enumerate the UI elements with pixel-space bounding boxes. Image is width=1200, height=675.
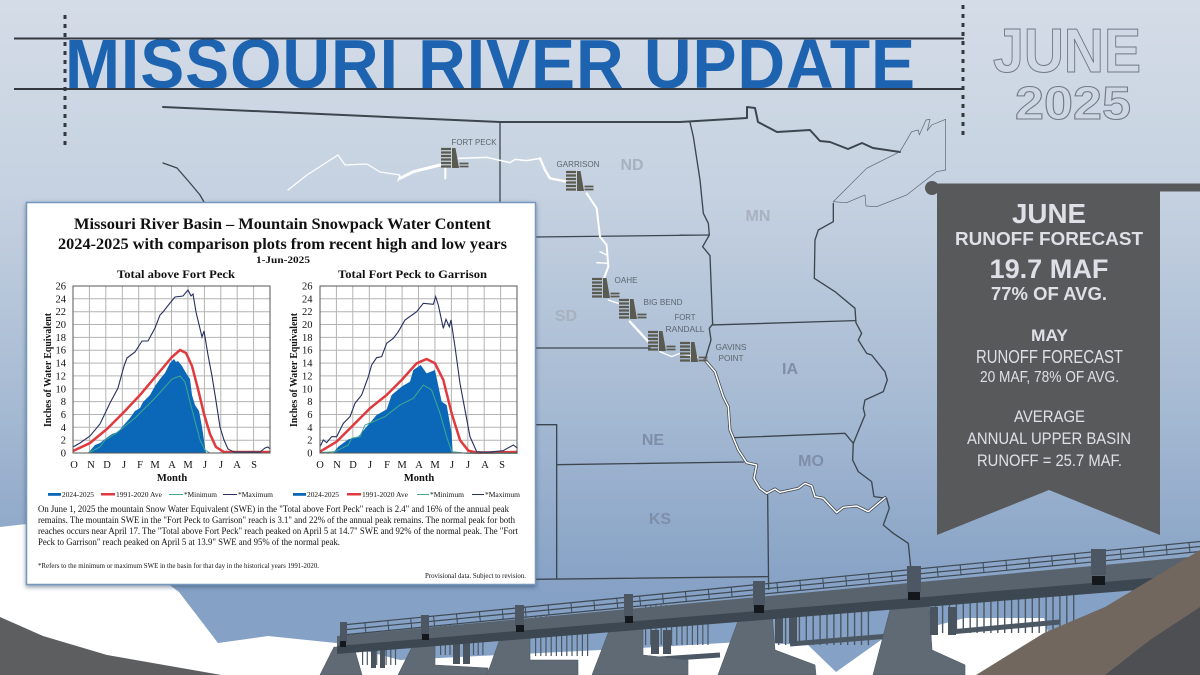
y axis labels: 8 bbox=[61, 397, 66, 408]
y axis labels: 0 bbox=[61, 448, 66, 460]
month labels: A bbox=[415, 460, 423, 471]
average runoff text bbox=[967, 407, 1131, 470]
card heading: 1-Jun-2025 bbox=[256, 256, 310, 266]
y axis labels: 6 bbox=[61, 410, 66, 421]
chart: Total above Fort Peck: Total above Fort Peck bbox=[117, 267, 235, 281]
y axis labels: 14 bbox=[56, 359, 67, 370]
month labels: D bbox=[349, 460, 357, 471]
title with ruled lines: MISSOURI RIVER UPDATE bbox=[65, 25, 915, 103]
dam: Fort Peck bbox=[441, 138, 497, 168]
legend: *Maximum bbox=[238, 490, 273, 499]
railing posts bbox=[340, 549, 1106, 642]
May forecast text: MAY bbox=[1031, 326, 1069, 345]
y axis labels bbox=[302, 282, 313, 460]
state labels: KS bbox=[649, 511, 671, 528]
May forecast text bbox=[976, 326, 1123, 386]
title with ruled lines bbox=[14, 5, 964, 145]
legend bbox=[48, 490, 273, 499]
dam: Gavins Point: GAVINS bbox=[716, 343, 746, 352]
y axis labels: 8 bbox=[307, 397, 312, 408]
dam: Fort Randall: FORT bbox=[674, 313, 696, 322]
state labels: SD bbox=[555, 308, 577, 325]
state borders west and north bbox=[163, 107, 900, 348]
y axis labels: 24 bbox=[302, 294, 313, 305]
y axis labels: 18 bbox=[56, 333, 66, 344]
southern state borders bbox=[535, 323, 911, 589]
bridge railing bbox=[342, 542, 1200, 635]
y axis labels: 26 bbox=[302, 282, 312, 292]
bridge deck bbox=[337, 556, 1200, 650]
card heading: 2024-2025 with comparison plots from recent high and low years bbox=[58, 236, 507, 253]
month labels: J bbox=[203, 460, 207, 471]
chart: Total above Fort Peck bbox=[42, 267, 273, 499]
June forecast text: 19.7 MAF bbox=[990, 254, 1108, 284]
y axis labels: 18 bbox=[302, 333, 312, 344]
y axis labels: 26 bbox=[56, 282, 66, 292]
legend: *Minimum bbox=[430, 490, 464, 499]
dam: Garrison: GARRISON bbox=[556, 160, 600, 169]
y axis labels: 2 bbox=[307, 436, 312, 447]
legend: *Maximum bbox=[485, 490, 520, 499]
June forecast text: JUNE bbox=[1012, 198, 1086, 229]
Missouri River upper reach bbox=[288, 155, 702, 358]
area: 2024-2025 snowpack bbox=[88, 359, 206, 453]
plot frame bbox=[73, 286, 270, 453]
banner body bbox=[937, 184, 1160, 535]
month labels: N bbox=[333, 460, 341, 471]
legend: 2024-2025 bbox=[307, 490, 339, 499]
y axis labels: 10 bbox=[56, 384, 66, 395]
snow covered hills bbox=[0, 518, 1060, 675]
x axis title: Month bbox=[157, 473, 187, 484]
y axis labels: 4 bbox=[61, 423, 67, 434]
state labels: MN bbox=[746, 208, 770, 225]
month labels: M bbox=[150, 460, 160, 471]
y axis labels: 6 bbox=[307, 410, 312, 421]
month labels: O bbox=[70, 460, 78, 471]
snowpack report card bbox=[26, 202, 536, 584]
month labels: D bbox=[103, 460, 111, 471]
card background bbox=[26, 202, 536, 584]
y axis labels: 2 bbox=[61, 436, 66, 447]
month labels: S bbox=[499, 460, 505, 471]
y axis labels: 14 bbox=[302, 359, 313, 370]
snowpack summary paragraph: Peck to Garrison" reach peaked on April 5 at 13.9" SWE and 95% of the normal peak. bbox=[38, 537, 340, 548]
date: June 2025 outlined: JUNE bbox=[993, 17, 1141, 86]
legend: 1991-2020 Ave bbox=[362, 490, 409, 499]
snowpack summary paragraph: On June 1, 2025 the mountain Snow Water Equivalent (SWE) in the "Total above Fort Peck" reach is 2.4" and 16% of the annual peak bbox=[38, 504, 509, 515]
legend: *Minimum bbox=[184, 490, 217, 499]
state labels: IA bbox=[782, 361, 798, 378]
May forecast text: RUNOFF FORECAST bbox=[976, 347, 1123, 367]
June forecast text bbox=[955, 198, 1143, 304]
June forecast text: RUNOFF FORECAST bbox=[955, 229, 1143, 249]
Missouri River lower reach bbox=[705, 360, 885, 513]
runoff forecast banner bbox=[925, 181, 1200, 535]
y axis labels: 0 bbox=[307, 448, 312, 460]
legend: 1991-2020 Ave bbox=[116, 490, 163, 499]
y axis labels: 24 bbox=[56, 294, 67, 305]
card heading: Missouri River Basin – Mountain Snowpack Water Content bbox=[74, 216, 492, 233]
dam: Oahe: OAHE bbox=[614, 276, 638, 285]
month labels: A bbox=[481, 460, 489, 471]
y axis labels: 20 bbox=[302, 320, 312, 331]
dam: Gavins Point bbox=[680, 342, 746, 363]
dam: Oahe bbox=[592, 276, 638, 298]
month labels: F bbox=[384, 460, 390, 471]
month labels: A bbox=[168, 460, 176, 471]
month labels: J bbox=[450, 460, 454, 471]
y axis labels: 12 bbox=[302, 371, 312, 382]
dam: Fort Peck: FORT PECK bbox=[452, 138, 497, 147]
average runoff text: AVERAGE bbox=[1014, 407, 1085, 426]
month labels: M bbox=[183, 460, 193, 471]
dam bridge foreground bbox=[320, 542, 1200, 675]
y axis labels: 10 bbox=[302, 384, 312, 395]
x axis title: Month bbox=[404, 473, 434, 484]
Minnesota and Great Lakes outline bbox=[680, 119, 946, 325]
average runoff text: RUNOFF = 25.7 MAF. bbox=[977, 451, 1122, 470]
dam: Garrison bbox=[556, 160, 600, 191]
concrete piers bbox=[320, 602, 965, 675]
line: minimum bbox=[73, 376, 270, 453]
June forecast text: 77% OF AVG. bbox=[991, 284, 1107, 304]
month labels: S bbox=[251, 460, 257, 471]
state labels: ND bbox=[620, 157, 644, 174]
dam: Fort Randall bbox=[648, 313, 705, 351]
footnote: *Refers to the minimum or maximum SWE in the basin for that day in the historical years 1991-2020. bbox=[38, 562, 319, 570]
y axis labels: 4 bbox=[307, 423, 313, 434]
map of the upper Missouri basin bbox=[163, 107, 946, 589]
y axis title: Inches of Water Equivalent bbox=[288, 313, 300, 427]
month labels: J bbox=[219, 460, 223, 471]
y axis labels: 22 bbox=[56, 307, 66, 318]
state labels: NE bbox=[642, 432, 664, 449]
dam: Big Bend: BIG BEND bbox=[644, 298, 683, 307]
month labels: J bbox=[122, 460, 126, 471]
snowpack summary paragraph bbox=[38, 504, 518, 548]
y axis labels: 16 bbox=[302, 346, 312, 357]
date: June 2025 outlined bbox=[993, 17, 1141, 129]
month labels bbox=[316, 460, 505, 471]
dam: Fort Randall: RANDALL bbox=[666, 325, 705, 334]
month labels bbox=[70, 460, 257, 471]
provisional data note: Provisional data. Subject to revision. bbox=[425, 572, 526, 580]
average runoff text: ANNUAL UPPER BASIN bbox=[967, 429, 1131, 448]
spillway gate bars bbox=[362, 610, 1075, 660]
month labels: O bbox=[316, 460, 324, 471]
month labels: N bbox=[87, 460, 95, 471]
line: average bbox=[73, 350, 270, 452]
banner hanger bar bbox=[925, 181, 1200, 195]
y axis labels: 22 bbox=[302, 307, 312, 318]
y axis title: Inches of Water Equivalent bbox=[42, 313, 54, 427]
snowpack summary paragraph: reaches occurs near April 17. The "Total above Fort Peck" reach peaked on April 5 at 14.7" SWE and 92% of the normal peak. The "Fort bbox=[38, 526, 518, 537]
gate hoists bbox=[371, 607, 956, 668]
month labels: J bbox=[466, 460, 470, 471]
May forecast text: 20 MAF, 78% OF AVG. bbox=[980, 369, 1119, 386]
rocky bank lower right bbox=[976, 550, 1200, 675]
month labels: J bbox=[368, 460, 372, 471]
snowpack summary paragraph: remains. The mountain SWE in the "Fort Peck to Garrison" reach is 3.1" and 22% of the annual peak remains. The normal peak for both bbox=[38, 515, 515, 526]
plotted series bbox=[320, 297, 518, 453]
date: June 2025 outlined: 2025 bbox=[1015, 77, 1131, 129]
y axis labels: 12 bbox=[56, 371, 66, 382]
chart: Total Fort Peck to Garrison bbox=[288, 267, 520, 499]
state labels: MO bbox=[798, 453, 824, 470]
chart: Total Fort Peck to Garrison: Total Fort Peck to Garrison bbox=[338, 267, 487, 281]
y axis labels bbox=[56, 282, 67, 460]
month labels: A bbox=[233, 460, 241, 471]
y axis labels: 16 bbox=[56, 346, 66, 357]
dam: Gavins Point: POINT bbox=[718, 354, 744, 363]
line: maximum bbox=[73, 290, 270, 452]
state labels bbox=[555, 157, 824, 528]
month labels: F bbox=[137, 460, 143, 471]
card heading bbox=[58, 216, 507, 266]
legend: 2024-2025 bbox=[62, 490, 94, 499]
month labels: M bbox=[430, 460, 440, 471]
post footing blocks bbox=[340, 576, 1105, 647]
legend bbox=[293, 490, 520, 499]
month labels: M bbox=[397, 460, 407, 471]
plot frame bbox=[320, 286, 517, 453]
y axis labels: 20 bbox=[56, 320, 66, 331]
dam: Big Bend bbox=[619, 298, 683, 319]
